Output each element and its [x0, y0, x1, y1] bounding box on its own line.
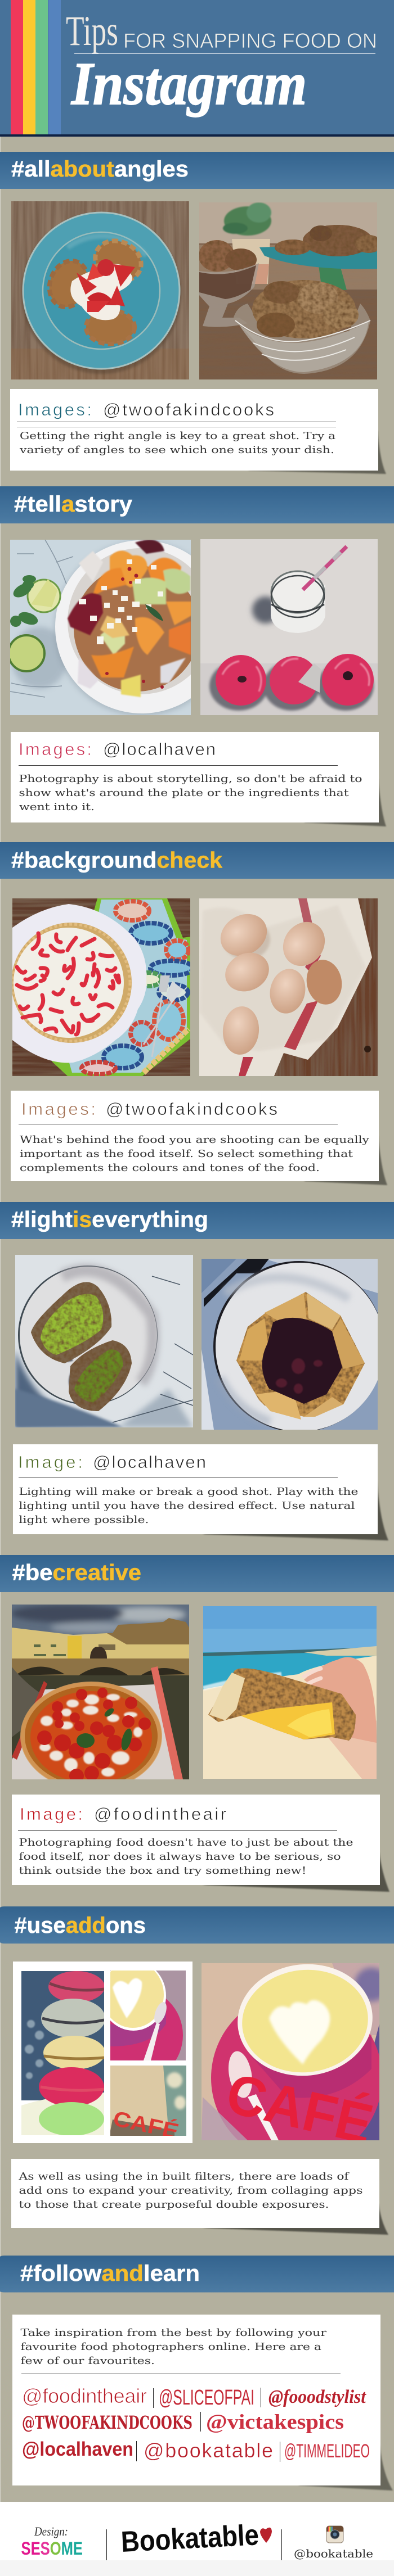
photo: double exposure latte and cafe sign: CAFÉ — [221, 2062, 379, 2156]
photo: marbled tart on patterned napkin — [11, 898, 193, 1076]
photo: avocado toast on white plate — [15, 1255, 193, 1427]
caption card — [12, 1795, 389, 1892]
title: Instagram: Instagram — [70, 51, 307, 117]
credit: Image: — [18, 1452, 83, 1472]
design credit: SESOME — [21, 2538, 83, 2559]
card: favourite photographers — [12, 2315, 393, 2491]
photo: oat cookies in glass bowls — [199, 202, 382, 379]
section: light is everything — [0, 1202, 394, 1540]
icon: heart — [260, 2528, 272, 2543]
intro text: favourite food photographers online. Here are a — [20, 2341, 321, 2353]
heading bar: #tellastory — [14, 492, 133, 517]
section: follow and learn — [0, 2256, 394, 2491]
heading bar: #backgroundcheck — [11, 848, 223, 873]
heading bar — [0, 842, 394, 879]
photo: grilled cheese on beach — [203, 1606, 377, 1779]
tip text: As well as using the in built filters, there are loads of — [18, 2171, 350, 2182]
section: use add ons — [0, 1906, 394, 2235]
tip text: variety of angles to see which one suits your dish. — [19, 444, 334, 456]
tip text: show what's around the plate or the ingredients that — [19, 787, 349, 799]
credit: @twoofakindcooks — [106, 1099, 277, 1119]
design credit: Design: — [34, 2524, 68, 2538]
heading bar — [0, 486, 394, 523]
tip text: Lighting will make or break a good shot. Play with the — [19, 1486, 358, 1498]
handle list: @localhaven — [22, 2438, 133, 2460]
handle list: @SLICEOFPAI — [159, 2386, 254, 2410]
tip text: add ons to expand your creativity, from collaging apps — [19, 2185, 362, 2197]
heading bar — [0, 152, 394, 189]
credit: @localhaven — [93, 1452, 206, 1472]
heading bar: #lightiseverything — [11, 1208, 208, 1232]
credit: @localhaven — [103, 739, 216, 759]
title: for snapping food on: FOR SNAPPING FOOD ON — [123, 29, 377, 52]
caption card — [13, 1444, 388, 1540]
tip text: food itself, nor does it always have to be serious, so — [19, 1851, 341, 1863]
photo: waffles on teal plate — [11, 201, 189, 379]
credit: Images: — [21, 1099, 96, 1119]
photo: latte with heart — [87, 1961, 186, 2083]
photo: fruit salad bowl on marble — [8, 540, 229, 716]
handle list: @bookatable — [144, 2439, 273, 2462]
handle list: @fooodstylist — [268, 2387, 366, 2407]
footer — [0, 2502, 394, 2576]
tip text: complements the colours and tones of the food. — [20, 1162, 320, 1174]
header banner — [0, 0, 394, 137]
title: Tips: Tips — [66, 8, 118, 55]
heading bar: #followandlearn — [20, 2261, 200, 2286]
handle list — [22, 2384, 370, 2462]
heading bar: #becreative — [12, 1561, 141, 1585]
tip text: light where possible. — [19, 1514, 149, 1526]
heading bar — [0, 2256, 394, 2293]
heading bar — [0, 1202, 394, 1239]
heading bar: #useaddons — [15, 1913, 146, 1938]
intro text: Take inspiration from the best by following your — [20, 2327, 326, 2339]
section: background check — [0, 842, 394, 1185]
intro text: few of our favourites. — [20, 2355, 155, 2367]
photo: pizza box by Ponte Vecchio — [11, 1605, 189, 1790]
tip text: Getting the right angle is key to a great shot. Try a — [20, 430, 335, 442]
tip text: went into it. — [19, 801, 95, 813]
heading bar — [0, 1555, 394, 1592]
tip text: Photographing food doesn't have to just be about the — [19, 1837, 353, 1849]
heading bar — [0, 1906, 394, 1944]
tip text: important as the food itself. So select something that — [20, 1148, 353, 1160]
photo: eggs on white tea towel — [199, 898, 378, 1076]
photo: double exposure latte and cafe sign — [202, 1958, 388, 2163]
credit: Image: — [20, 1804, 83, 1824]
tip text: to those that create purposeful double exposures. — [19, 2199, 329, 2211]
section: tell a story — [0, 486, 394, 826]
photo: cafe sign — [110, 2066, 186, 2144]
photo: macaron stack — [21, 1971, 105, 2136]
tip text: What's behind the food you are shooting can be equally — [20, 1134, 370, 1146]
photo: cafe sign: CAFÉ — [111, 2106, 181, 2144]
heading bar: #allaboutangles — [11, 157, 189, 182]
handle list: @foodintheair — [22, 2384, 147, 2407]
photo: berry galette on white plate — [202, 1259, 384, 1432]
handle list: @victakespics — [206, 2411, 344, 2434]
caption card — [11, 1091, 387, 1185]
credit: Images: — [18, 400, 92, 419]
Bookatable logo: Bookatable — [120, 2519, 259, 2559]
caption card — [10, 389, 386, 474]
credit: @twoofakindcooks — [103, 400, 274, 419]
tip text: Photography is about storytelling, so don't be afraid to — [19, 773, 362, 785]
handle list: @TWOOFAKINDCOOKS — [22, 2412, 192, 2433]
icon: instagram camera — [326, 2526, 343, 2543]
instagram handle: @bookatable — [294, 2547, 373, 2560]
caption card — [11, 732, 386, 826]
collage frame — [13, 1961, 192, 2144]
section: all about angles — [0, 152, 394, 474]
section: be creative — [0, 1555, 394, 1892]
caption card — [11, 2159, 388, 2235]
credit: @foodintheair — [94, 1804, 226, 1824]
tip text: think outside the box and try something new! — [19, 1865, 306, 1877]
instagram colour stripes — [11, 0, 61, 134]
tip text: lighting until you have the desired effect. Use natural — [19, 1500, 355, 1512]
photo: milk jar and pink doughnuts — [200, 539, 378, 715]
credit: Images: — [19, 739, 92, 759]
design credit — [21, 2524, 83, 2559]
